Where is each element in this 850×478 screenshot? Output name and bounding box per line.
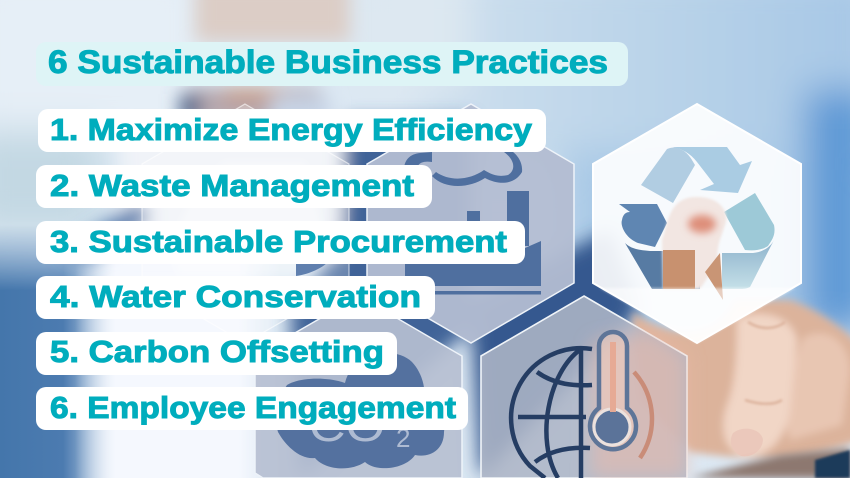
icon: thermometer: [590, 332, 636, 449]
title banner: 6 Sustainable Business Practices: [48, 44, 608, 80]
item 3: 3. Sustainable Procurement: [50, 224, 507, 259]
white glow at hexagon base: [600, 288, 795, 343]
hexagon: recycle icon: [593, 104, 801, 343]
icon: cloud: [276, 353, 444, 468]
icon: globe: [511, 348, 652, 478]
dark cloud edge in left hexagon: [296, 262, 328, 276]
hexagon: CO2 cloud: [255, 296, 462, 478]
finger over the recycle icon: [662, 197, 726, 300]
item 1: 1. Maximize Energy Efficiency: [50, 112, 533, 147]
hand and pointing finger: [632, 300, 850, 478]
item 5: [36, 332, 397, 375]
label: CO2: [309, 402, 410, 453]
faint shape inside left hexagon: [174, 162, 325, 276]
finger creases: [745, 322, 785, 404]
item 2: 2. Waste Management: [50, 168, 414, 203]
label: CO2: 2: [396, 423, 410, 453]
item 4: [36, 276, 435, 319]
item 2: [36, 165, 432, 208]
item 3: [36, 221, 525, 264]
hexagon: faint left: [142, 104, 349, 343]
hexagon: factory icon: [367, 104, 574, 343]
icon: recycle arrows: [619, 147, 775, 289]
hexagon: globe and thermometer: [481, 296, 687, 478]
item 5: 5. Carbon Offsetting: [50, 334, 384, 369]
item 6: 6. Employee Engagement: [50, 390, 456, 425]
item 4: 4. Water Conservation: [50, 279, 421, 314]
icon: factory with smoke: [404, 150, 541, 294]
label: CO2: CO: [309, 402, 385, 451]
